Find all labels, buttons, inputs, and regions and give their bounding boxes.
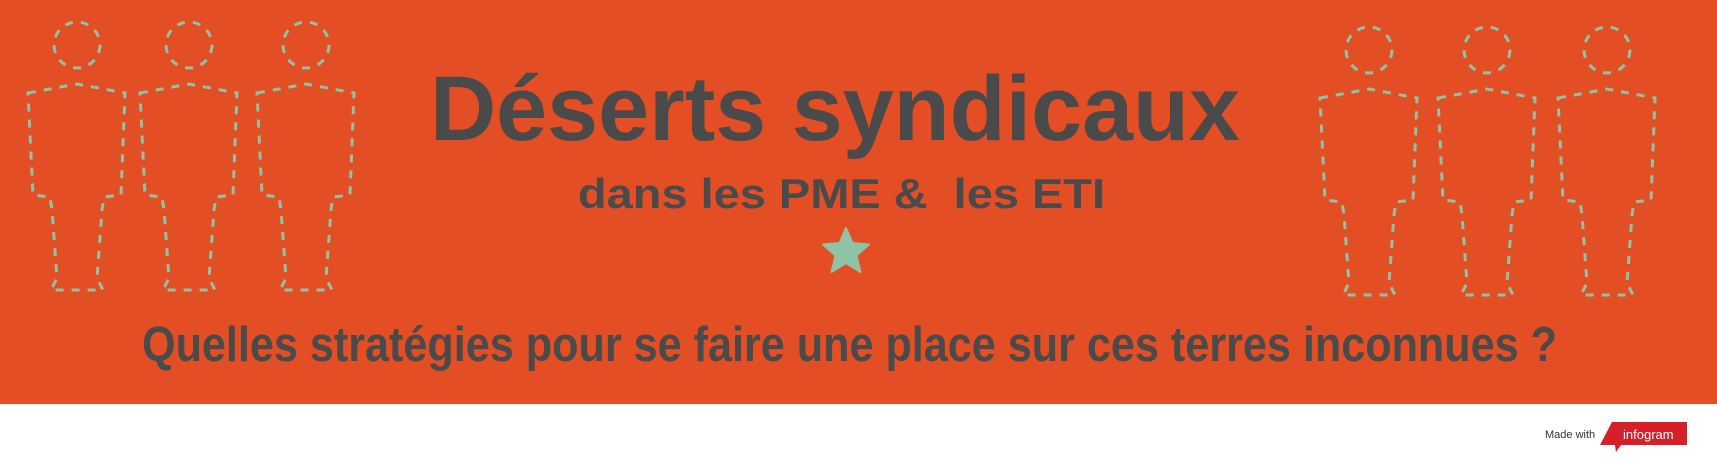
- icon: star: [823, 228, 869, 272]
- icons: left people group: [28, 22, 354, 290]
- footer: made with infogram: Made with: [1545, 429, 1595, 441]
- icons: right people group: [1320, 27, 1655, 295]
- subtitle: dans les PME & les ETI: [578, 170, 1105, 217]
- footer: made with infogram: [1545, 422, 1687, 452]
- title: Déserts syndicaux: [430, 58, 1240, 160]
- question heading: Quelles stratégies pour se faire une place sur ces terres inconnues ?: [142, 318, 1557, 372]
- footer: made with infogram: infogram: [1623, 427, 1674, 442]
